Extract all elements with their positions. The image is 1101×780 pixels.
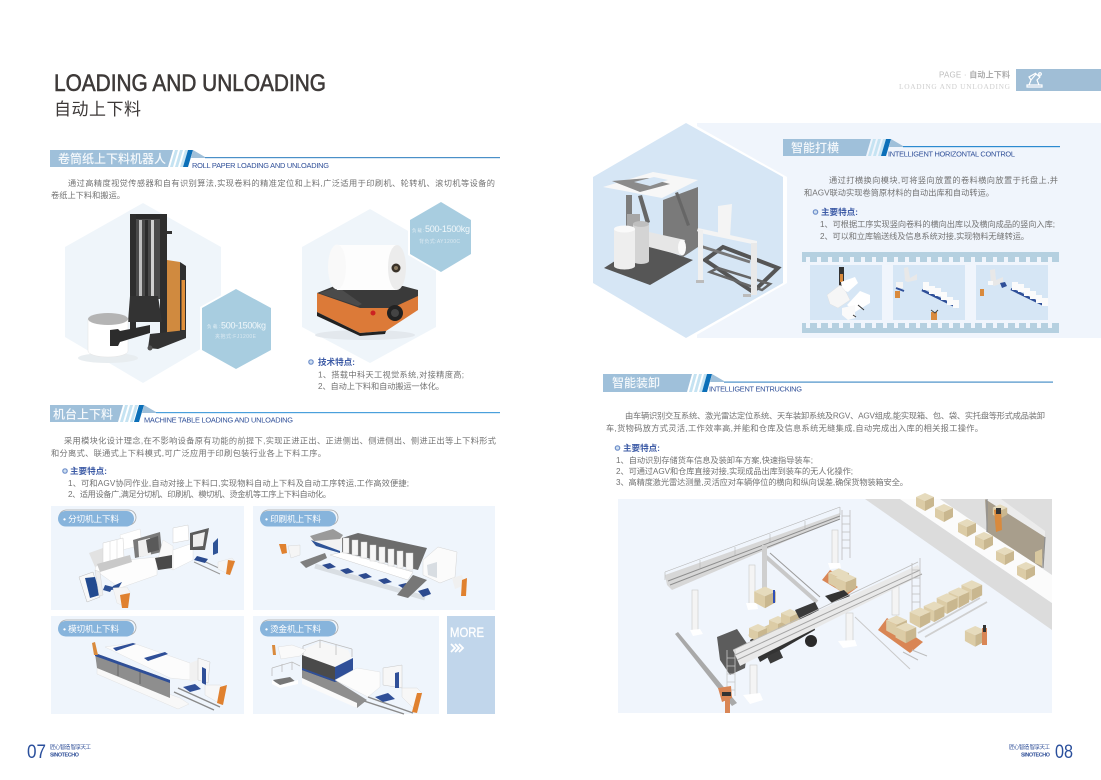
icon: horizontal tilting machine	[603, 172, 778, 297]
panel: intelligent horizontal background	[593, 120, 1101, 341]
section heading: intelligent horizontal: 智能打横	[791, 140, 839, 155]
cart 1	[822, 568, 858, 603]
section heading: intelligent horizontal	[783, 139, 1060, 158]
text block: horizontal features: 主要特点:	[821, 206, 858, 217]
icon: slitter machine	[79, 525, 235, 608]
floor rail and AGV	[675, 632, 737, 713]
thumbnail: robot palletising	[976, 265, 1048, 320]
text block: machine table features: 1、可和AGV协同作业,自动对接上下料口,实现物料自动上下料及自动工序转运,工作高效便捷;	[68, 478, 409, 488]
text block: entrucking features	[615, 442, 908, 487]
text block: horizontal features	[813, 206, 1055, 241]
panel: AGV robot	[302, 209, 436, 363]
title: English: LOADING AND UNLOADING	[54, 70, 326, 97]
warehouse wall	[865, 493, 1052, 630]
panel: foil stamping	[253, 616, 439, 714]
thumbnail: roll turning	[810, 265, 882, 320]
icon: forklift robot	[78, 214, 186, 363]
label pill: die cutter: • 模切机上下料	[63, 623, 119, 634]
label pill: foil stamping: • 烫金机上下料	[265, 623, 321, 634]
panel: printing press	[253, 506, 495, 610]
page tag: top right	[899, 69, 1101, 91]
icon: roll carrying AGV	[315, 244, 418, 340]
panel: load hexagon FJ1200E	[200, 287, 273, 371]
panel: more	[447, 616, 495, 714]
text block: entrucking intro: 由车辆识别交互系统、激光雷达定位系统、天车装卸系统及RGV、AGV组成,能实现箱、包、袋、实托盘等形式成品装卸	[625, 410, 1045, 420]
cart 2 and pallet line	[878, 580, 987, 660]
film strip	[802, 252, 1059, 333]
text block: machine table intro: 采用模块化设计理念,在不影响设备原有功能的前提下,实现正进正出、正进侧出、侧进侧出、侧进正出等上下料形式	[64, 436, 496, 446]
gantry front	[727, 558, 922, 704]
panel: load hexagon AY1200C: 500-1500kg	[425, 224, 470, 234]
label pill: printing press	[260, 510, 338, 526]
icon: chevrons	[451, 644, 463, 652]
text block: entrucking features: 2、可通过AGV和仓库直接对接,实现成品出库到装车的无人化操作;	[616, 466, 853, 476]
panel: die cutter	[51, 616, 244, 714]
text block: horizontal features: 2、可以和立库输送线及信息系统对接,实现物料无缝转运。	[820, 231, 1029, 241]
truck	[717, 602, 819, 675]
label pill: foil stamping	[260, 620, 338, 636]
text block: entrucking intro: 车,货物码放方式灵活,工作效率高,并能和仓库及信息系统无缝集成,自动完成出入库的相关报工操作。	[606, 423, 983, 433]
text block: roll paper intro: 通过高精度视觉传感器和自有识别算法,实现卷料的精准定位和上料,广泛适用于印刷机、轮转机、滚切机等设备的	[68, 178, 495, 188]
panel: load hexagon AY1200C: 背负式:AY1200C	[419, 238, 460, 245]
footer: left: 07	[27, 742, 46, 763]
text block: machine table features: 主要特点:	[70, 465, 107, 476]
text block: machine table features: 2、适用设备广,满足分切机、印刷机、模切机、烫金机等工序上下料自动化。	[68, 489, 331, 499]
text block: tech features: 1、搭载中科天工视觉系统,对接精度高;	[318, 370, 464, 380]
label pill: slitter	[58, 510, 136, 526]
panel: forklift robot	[65, 203, 221, 383]
section heading: intelligent entrucking: 智能装卸	[612, 375, 660, 390]
icon: foil stamping machine	[272, 640, 422, 714]
text block: entrucking features: 1、自动识别存储货车信息及装卸车方案,快速指导装车;	[616, 455, 813, 465]
footer: right: SINOTECHO	[1021, 752, 1050, 758]
page tag: top right: PAGE · 自动上下料	[939, 70, 1010, 80]
footer: right: 08	[1055, 742, 1073, 763]
text block: machine table intro	[51, 436, 496, 458]
icon: printing press	[279, 529, 467, 598]
section heading: roll paper robot	[50, 150, 500, 170]
text block: entrucking features: 3、高精度激光雷达测量,灵活应对车辆停位的横向和纵向误差,确保货物装箱安全。	[616, 477, 908, 487]
text block: roll paper intro	[51, 178, 495, 200]
text block: tech features: 技术特点:	[318, 356, 355, 367]
panel: more: MORE	[450, 625, 484, 640]
section heading: intelligent horizontal: INTELLIGENT HORIZONTAL CONTROL	[888, 150, 1015, 158]
gantry rear	[665, 507, 850, 636]
panel: slitter	[51, 506, 244, 610]
section heading: machine table	[50, 405, 500, 424]
icon: robot arm	[1027, 73, 1042, 87]
section heading: roll paper robot: 卷筒纸上下料机器人	[58, 151, 166, 166]
text block: entrucking features: 主要特点:	[623, 442, 660, 453]
thumbnail: robot lifting	[893, 265, 965, 320]
panel: load hexagon FJ1200E: 夹抱式:FJ1200E	[215, 333, 257, 340]
section heading: machine table: 机台上下料	[53, 406, 113, 422]
footer: right: 匠心智造 智享天工	[1009, 743, 1050, 751]
footer: left: 匠心智造 智享天工	[50, 743, 91, 751]
text block: machine table intro: 和分离式、联通式上下料模式,可广泛应用于印刷包装行业各上下料工序。	[51, 448, 326, 458]
panel: load hexagon AY1200C: 负载:	[412, 227, 424, 234]
section heading: intelligent entrucking: INTELLIGENT ENTRUCKING	[709, 384, 802, 394]
title: Chinese: 自动上下料	[54, 100, 141, 119]
page tag: top right: LOADING AND UNLOADING	[899, 82, 1011, 91]
footer: left: SINOTECHO	[50, 752, 79, 758]
text block: roll paper intro: 卷纸上下料和搬运。	[51, 190, 125, 200]
footer: left	[27, 742, 91, 763]
text block: tech features: 2、自动上下料和自动搬运一体化。	[318, 381, 444, 391]
section heading: intelligent entrucking	[603, 374, 1053, 394]
panel: entrucking scene	[618, 493, 1052, 713]
text block: entrucking intro	[606, 410, 1045, 433]
text block: horizontal intro	[804, 175, 1058, 198]
panel: load hexagon AY1200C	[408, 200, 473, 274]
section heading: machine table: MACHINE TABLE LOADING AND UNLOADING	[144, 416, 293, 424]
label pill: slitter: • 分切机上下料	[63, 513, 119, 524]
panel: load hexagon FJ1200E: 500-1500kg	[221, 320, 266, 330]
text block: horizontal features: 1、可根据工序实现竖向卷料的横向出库以及横向成品的竖向入库;	[820, 219, 1055, 229]
label pill: printing press: • 印刷机上下料	[265, 513, 321, 524]
section heading: roll paper robot: ROLL PAPER LOADING AND UNLOADING	[192, 161, 329, 170]
label pill: die cutter	[58, 620, 136, 636]
text block: horizontal intro: 和AGV联动实现卷筒原材料的自动出库和自动转运。	[804, 188, 994, 198]
text block: tech features	[309, 356, 464, 391]
footer: right	[1009, 742, 1073, 763]
icon: die cutter	[92, 642, 227, 710]
text block: horizontal intro: 通过打横换向模块,可将竖向放置的卷料横向放置于托盘上,并	[829, 175, 1058, 185]
title	[54, 70, 326, 119]
text block: machine table features	[63, 465, 409, 499]
panel: load hexagon FJ1200E: 负载:	[207, 323, 220, 330]
